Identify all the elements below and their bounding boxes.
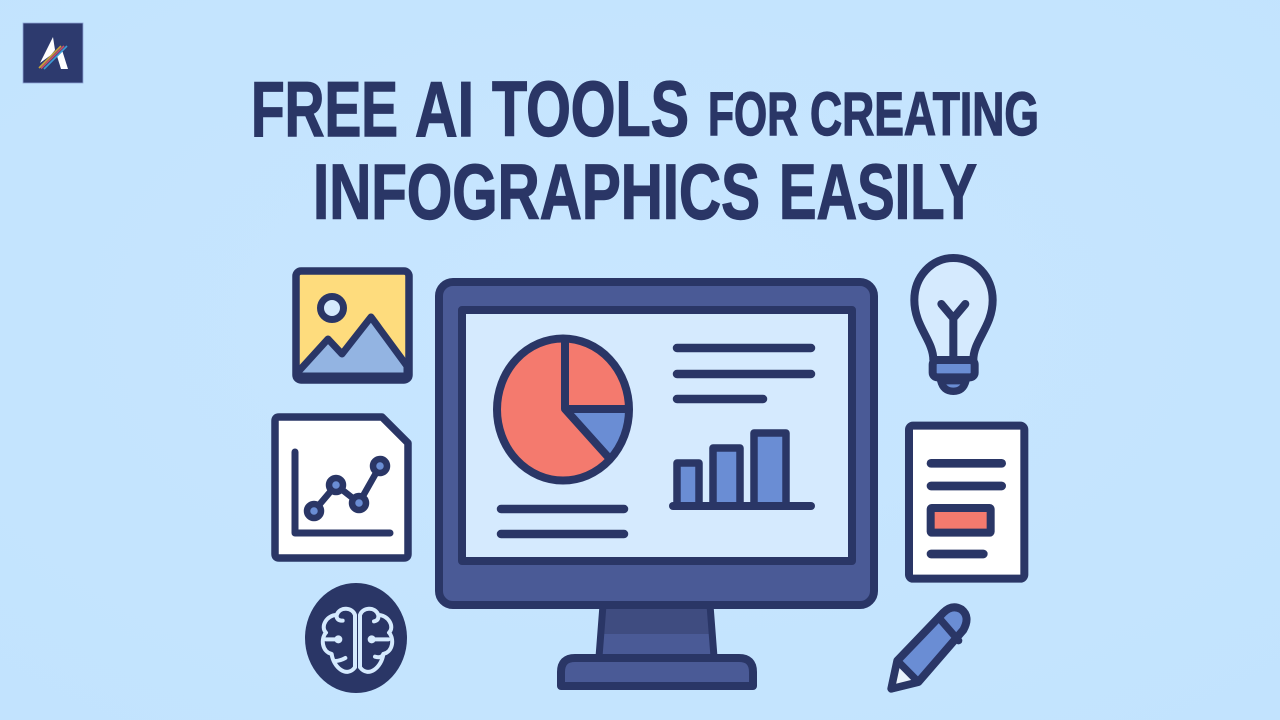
title: INFOGRAPHICS — [313, 148, 760, 236]
icon: text document — [909, 426, 1024, 579]
pie chart — [497, 338, 629, 480]
monitor screen — [462, 310, 852, 561]
icon: image picture — [296, 271, 409, 380]
icon: pencil — [891, 607, 967, 689]
icon: line chart document — [275, 417, 408, 558]
title: AI — [415, 65, 474, 153]
monitor frame — [439, 282, 874, 605]
text lines — [501, 348, 811, 534]
monitor — [439, 282, 874, 686]
title: CREATING — [810, 80, 1039, 148]
icon: light bulb — [914, 258, 993, 391]
title: TOOLS — [492, 64, 689, 152]
title: EASILY — [779, 148, 977, 236]
logo — [23, 23, 83, 83]
monitor stand — [561, 605, 753, 686]
bar chart — [673, 433, 811, 506]
icon: brain — [305, 583, 407, 693]
title: FREE — [251, 65, 398, 153]
title — [251, 64, 1039, 236]
title: FOR — [708, 80, 798, 148]
